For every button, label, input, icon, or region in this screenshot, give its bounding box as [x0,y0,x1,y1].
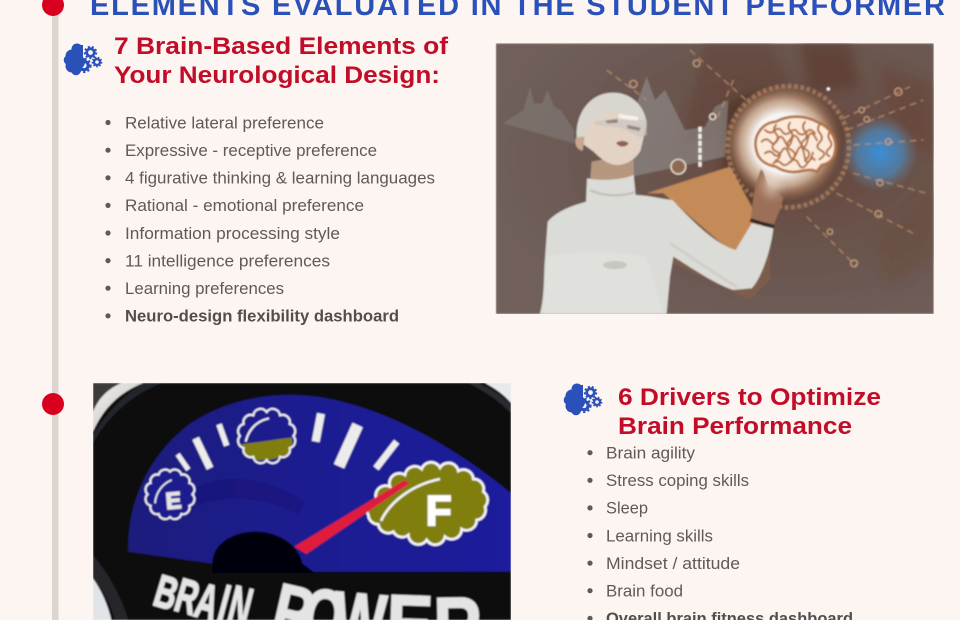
bullet list: Mindset / attitude [606,555,740,573]
woman: neck [590,159,634,180]
orange wedge [647,166,762,250]
empty brain symbol: E [165,487,182,514]
turtleneck body [540,175,773,313]
bullet list: Learning skills [606,527,713,545]
blue dial face [128,395,511,572]
icon: brain with gears [64,44,102,75]
visor [595,120,647,138]
orb ring and glow [728,86,849,207]
data dashes [607,50,927,267]
full brain symbol [367,462,488,545]
tick marks [178,414,397,470]
BRAIN POWER label [151,572,480,620]
photo: woman touching holographic brain [496,43,934,314]
photo: brain power fuel gauge [93,383,511,620]
bullet list: Expressive - receptive preference [125,142,377,160]
heading: Your Neurological Design: [114,62,440,89]
bullet list: Neuro-design flexibility dashboard [125,308,399,326]
bullet list: 4 figurative thinking & learning languages [125,170,435,188]
bullet list [587,444,853,620]
bullet list: Information processing style [125,225,340,243]
needle [294,480,410,554]
timeline marker: section 1 [42,0,64,16]
icon: brain with gears [564,384,602,415]
bullet list [105,114,435,326]
pale city silhouette [503,87,574,143]
timeline rail [42,0,64,620]
half-full brain symbol [238,409,295,463]
heading [618,384,881,440]
heading [114,33,449,89]
heading: 6 Drivers to Optimize [618,384,881,411]
holographic brain [755,117,835,172]
hand [751,170,783,224]
chrome rim [93,383,119,408]
panel: neurological design text [64,33,449,326]
bullet list: Sleep [606,500,648,518]
soft background shading [683,43,933,287]
bullet list: Rational - emotional preference [125,197,364,215]
blue glow [844,118,916,189]
bullet list: Learning preferences [125,280,284,298]
full brain symbol: F [426,488,452,536]
bullet list: Brain food [606,582,683,600]
heading: Brain Performance [618,413,852,440]
bullet list: Brain agility [606,444,696,462]
heading: 7 Brain-Based Elements of [114,33,449,60]
bullet list: 11 intelligence preferences [125,252,330,270]
hub [212,532,316,573]
woman: head [576,111,646,166]
empty brain symbol [146,470,194,519]
panel: brain performance text [564,384,881,620]
BRAIN POWER label: B [148,566,184,620]
bullet list: Stress coping skills [606,472,749,490]
bullet list: Relative lateral preference [125,114,324,132]
timeline marker: section 2 [42,393,64,415]
